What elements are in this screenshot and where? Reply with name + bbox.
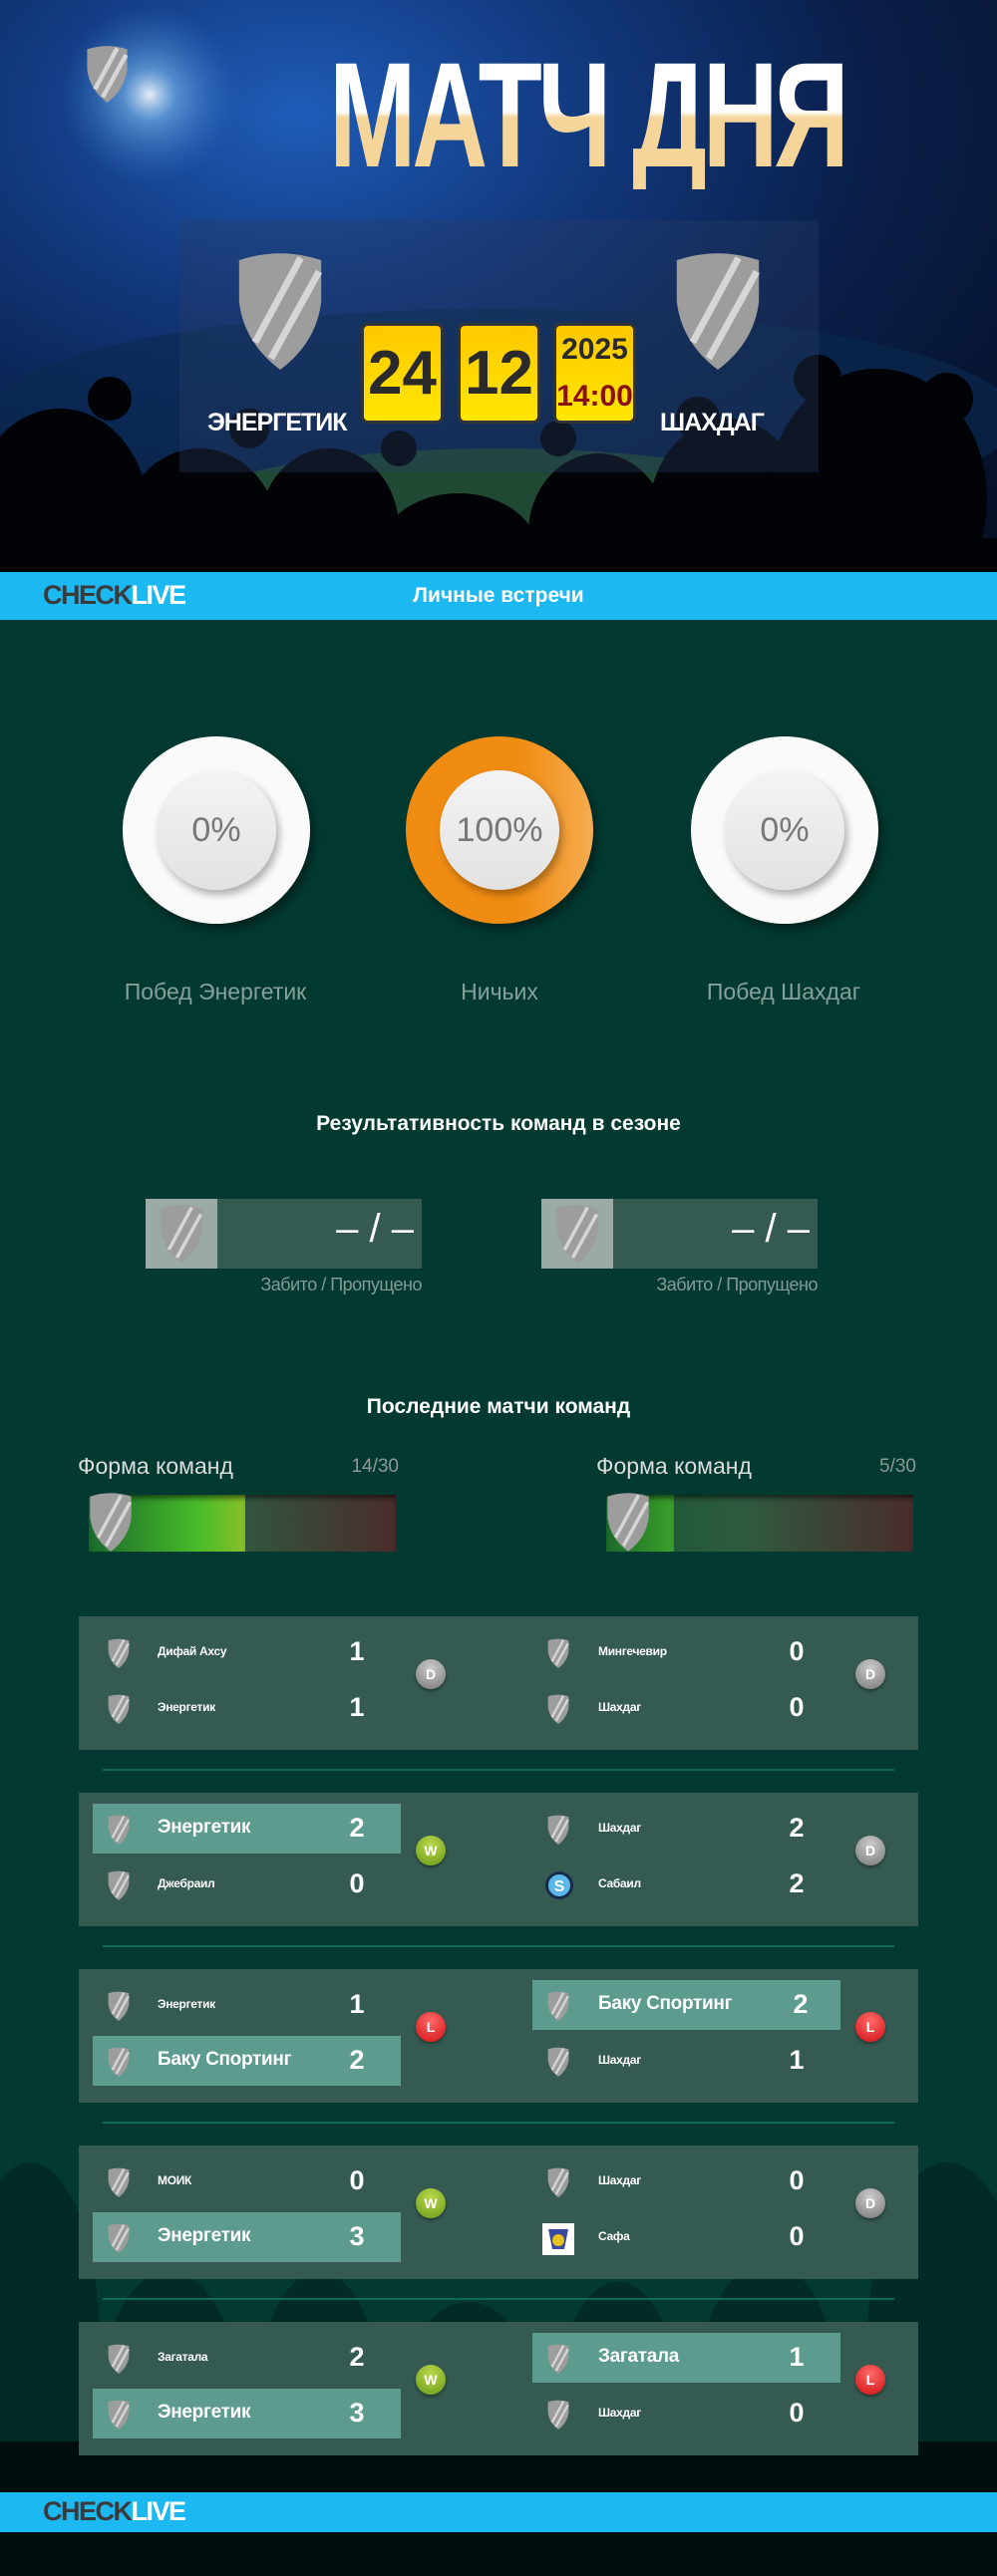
circle: home wins [123, 736, 310, 924]
match block 3: Энергетик [158, 1997, 215, 2011]
form number home: 14/30 [351, 1456, 399, 1477]
match block 2: W [424, 1843, 438, 1859]
circle: draws [406, 736, 593, 924]
date: year and time: 2025 [561, 333, 628, 366]
separators [103, 1769, 894, 1771]
date: year and time [553, 323, 636, 424]
match block 2: D [865, 1843, 875, 1859]
match block 4: 0 [349, 2165, 365, 2195]
match block 2 [79, 1793, 918, 1926]
match block 4: 3 [349, 2221, 365, 2251]
date: month [458, 323, 540, 424]
background crowd silhouette [0, 2162, 997, 2455]
date: month: 12 [465, 339, 533, 408]
match block 5: Энергетик [158, 2402, 250, 2423]
label: away wins: Побед Шахдаг [707, 979, 860, 1004]
footer bar: CHECKLIVE [43, 2496, 185, 2526]
match block 2: 2 [789, 1813, 805, 1843]
match block 1: Мингечевир [598, 1644, 667, 1658]
heading: season performance: Результативность команд в сезоне [316, 1112, 681, 1135]
match block 1: 0 [789, 1636, 805, 1666]
match block 5: L [866, 2372, 874, 2388]
match block 3: 1 [349, 1989, 365, 2019]
heading: last matches: Последние матчи команд [367, 1395, 630, 1418]
match panel [179, 220, 819, 472]
circle: away wins [691, 736, 878, 924]
form label away: Форма команд [596, 1453, 752, 1479]
form bar home [89, 1495, 396, 1552]
top bar: CHECKLIVE [43, 580, 185, 610]
footer bar [0, 2492, 997, 2532]
match block 3: L [866, 2019, 874, 2035]
match block 5: 0 [789, 2398, 805, 2428]
score box away: – / – [732, 1207, 810, 1251]
team name away: ШАХДАГ [660, 409, 764, 436]
match block 5 [79, 2322, 918, 2455]
match block 2: 2 [789, 1868, 805, 1898]
title: МАТЧ ДНЯ [329, 31, 845, 198]
icon: form shield away [607, 1493, 649, 1552]
match block 2: Джебраил [158, 1876, 214, 1890]
date: year and time: 14:00 [556, 380, 633, 413]
match block 1: D [426, 1666, 436, 1682]
match block 3: 2 [793, 1989, 809, 2019]
icon: away shield [676, 253, 760, 370]
circle: home wins: 0% [191, 811, 241, 849]
match block 4: 0 [789, 2221, 805, 2251]
caption home: Забито / Пропущено [260, 1275, 422, 1294]
match block 1: Дифай Ахсу [158, 1644, 226, 1658]
match block 2: 2 [349, 1813, 365, 1843]
score box away [541, 1199, 818, 1269]
match block 1: D [865, 1666, 875, 1682]
top bar: Личные встречи [413, 584, 584, 607]
form number away: 5/30 [879, 1456, 916, 1477]
match block 3: 1 [789, 2045, 805, 2075]
match block 4: Энергетик [158, 2225, 250, 2246]
match block 4: Шахдаг [598, 2173, 641, 2187]
team name home: ЭНЕРГЕТИК [207, 409, 347, 436]
match block 3: Баку Спортинг [598, 1993, 732, 2014]
match block 5: Загатала [158, 2350, 207, 2364]
match block 2: Сабаил [598, 1876, 641, 1890]
match block 3: Баку Спортинг [158, 2049, 291, 2070]
form label home: Форма команд [78, 1453, 233, 1479]
match block 2: Энергетик [158, 1817, 250, 1838]
circle: draws: 100% [457, 811, 542, 849]
match block 5: W [424, 2372, 438, 2388]
match block 2: 0 [349, 1868, 365, 1898]
match block 1: 0 [789, 1692, 805, 1722]
match block 3 [79, 1969, 918, 2103]
circle: away wins: 0% [760, 811, 810, 849]
icon: home shield [239, 253, 322, 370]
match block 2: S [554, 1878, 565, 1895]
match block 4 [79, 2146, 918, 2279]
match block 5: 2 [349, 2342, 365, 2372]
match block 5: 3 [349, 2398, 365, 2428]
icon: form shield home [90, 1493, 132, 1552]
header background [0, 0, 997, 572]
match block 4: Сафа [598, 2229, 629, 2243]
score box home: – / – [336, 1207, 414, 1251]
date: day: 24 [368, 339, 437, 408]
match block 5: 1 [789, 2342, 805, 2372]
match block 1: Энергетик [158, 1700, 215, 1714]
match block 3: 2 [349, 2045, 365, 2075]
match block 1: 1 [349, 1692, 365, 1722]
match block 4: 0 [789, 2165, 805, 2195]
match block 4: W [424, 2195, 438, 2211]
match block 3: Шахдаг [598, 2053, 641, 2067]
icon: small shield top left [87, 46, 128, 103]
match block 1: Шахдаг [598, 1700, 641, 1714]
top bar [0, 572, 997, 620]
form bar away [606, 1495, 913, 1552]
match block 4: D [865, 2195, 875, 2211]
match block 5: Шахдаг [598, 2406, 641, 2420]
score box home [146, 1199, 422, 1269]
match block 5: Загатала [598, 2346, 679, 2367]
match block 4: МОИК [158, 2173, 191, 2187]
date: day [361, 323, 444, 424]
match block 1 [79, 1616, 918, 1750]
label: home wins: Побед Энергетик [125, 979, 306, 1004]
match block 3: L [427, 2019, 435, 2035]
match block 2: Шахдаг [598, 1821, 641, 1835]
match block 1: 1 [349, 1636, 365, 1666]
label: draws: Ничьих [461, 979, 538, 1004]
caption away: Забито / Пропущено [656, 1275, 818, 1294]
